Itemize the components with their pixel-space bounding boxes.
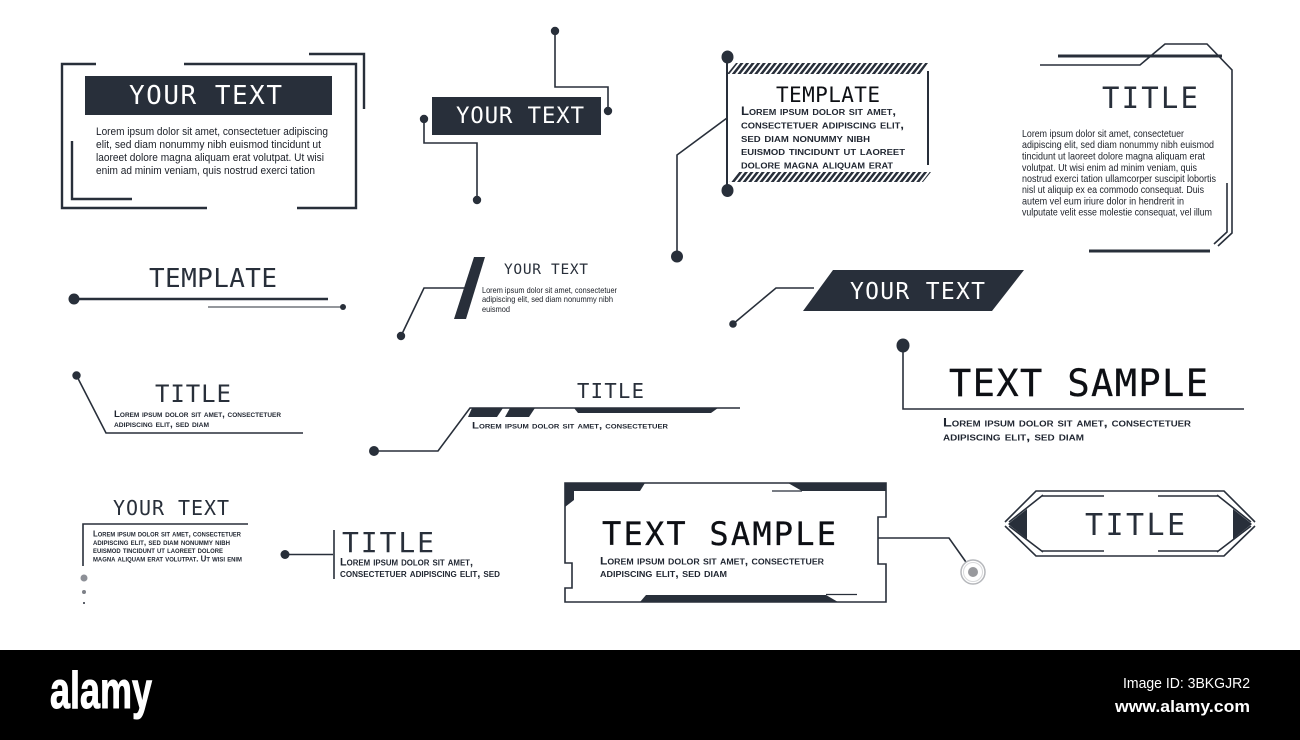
body text [600, 556, 824, 580]
body text: Lorem ipsum dolor sit amet, [340, 556, 473, 568]
slanted bar [454, 257, 485, 319]
connector [285, 530, 334, 579]
image id: Image ID: 3BKGJR2 [1123, 675, 1250, 692]
connector lines [424, 31, 608, 200]
body text: adipiscing elit, sed diam [114, 419, 209, 429]
right arrow [1233, 509, 1252, 539]
body text: volutpat. Ut wisi enim ad minim veniam, quis [1022, 162, 1197, 174]
url: www.alamy.com [1114, 697, 1250, 716]
dot [729, 320, 737, 328]
body text: sed diam nonummy nibh [741, 133, 870, 145]
label text: YOUR TEXT [456, 103, 584, 129]
heading: TITLE [1085, 508, 1185, 543]
panel: title with side connector [280, 526, 500, 580]
body text: Lorem ipsum dolor sit amet, consectetuer [600, 556, 824, 568]
footer bar [0, 650, 1300, 740]
dot [896, 338, 910, 352]
body text: Lorem ipsum dolor sit amet, consectetuer [93, 530, 242, 538]
underline with dots [68, 294, 346, 310]
dots [671, 50, 734, 262]
body text: tincidunt ut laoreet dolore magna aliquam erat [1022, 150, 1205, 162]
parallelogram [803, 270, 1024, 311]
hatched bars [727, 63, 931, 182]
connector [878, 538, 973, 572]
panel: title paragraph with chamfered frame [1022, 44, 1232, 251]
bracket [83, 524, 248, 566]
body text: Lorem ipsum dolor sit amet, consectetuer [943, 416, 1191, 430]
body text: nostrud exerci tation ullamcorper suscipit lobortis [1022, 173, 1216, 185]
heading: TEMPLATE [149, 264, 277, 294]
panel: text sample framed box [565, 483, 985, 602]
logo: alamy [50, 662, 152, 720]
body text: Lorem ipsum dolor sit amet, [741, 106, 896, 118]
frame lines [1040, 44, 1232, 246]
body text: dolore magna aliquam erat [741, 160, 893, 172]
heading: TITLE [155, 380, 231, 408]
heading: YOUR TEXT [129, 81, 282, 111]
spine [727, 57, 928, 190]
heading: TITLE [342, 526, 434, 559]
body text: adipiscing elit, sed diam nonummy nibh [482, 294, 613, 304]
body text: laoreet dolore magna aliquam erat volutpat. Ut wisi [96, 152, 324, 164]
heading: YOUR TEXT [113, 496, 229, 520]
body text: consectetuer adipiscing elit, sed [340, 568, 500, 580]
body text: euismod tincidunt ut laoreet dolore [93, 546, 223, 555]
body text [340, 556, 500, 580]
corner blocks [565, 483, 886, 602]
body text: adipiscing elit, sed diam nonummy nibh euismod [1022, 139, 1214, 151]
label bar [432, 97, 601, 135]
panel: your text with bracket [80, 496, 248, 604]
panel: your text bar with connectors [420, 27, 612, 204]
body text: magna aliquam erat volutpat. Ut wisi enim [93, 554, 242, 564]
panel: text sample with elbow line [896, 338, 1244, 444]
body text: euismod tincidunt ut laoreet [741, 146, 905, 158]
body text: adipiscing elit, sed diam [600, 568, 727, 580]
panel: hexagon title [1005, 491, 1255, 556]
dot [397, 332, 405, 340]
body text: autem vel eum iriure dolor in hendrerit in [1022, 196, 1184, 208]
panel: hatched template box [671, 50, 931, 262]
connector [733, 288, 814, 324]
thin accents [772, 491, 857, 594]
dot [369, 446, 379, 456]
line [374, 408, 740, 451]
panel: title with angled line [72, 371, 303, 433]
connector [677, 118, 727, 256]
panel: title over banded line [369, 379, 740, 456]
panel: template underline [68, 264, 346, 310]
left arrow [1008, 509, 1027, 539]
body text: adipiscing elit, sed diam [943, 430, 1084, 444]
label: YOUR TEXT [850, 279, 985, 305]
heading: TITLE [1102, 81, 1198, 115]
heading: TITLE [577, 379, 644, 403]
heading: TEXT SAMPLE [602, 515, 836, 553]
body text [1022, 128, 1216, 218]
line [903, 345, 1244, 409]
heading: TEMPLATE [776, 83, 880, 107]
body text [741, 106, 905, 172]
body text: Lorem ipsum dolor sit amet, consectetuer [472, 420, 669, 430]
line [76, 376, 303, 433]
heading: YOUR TEXT [504, 262, 588, 278]
body text: euismod [482, 304, 510, 314]
body text: Lorem ipsum dolor sit amet, consectetuer [1022, 128, 1184, 140]
panel: framed your text box [62, 54, 364, 208]
connector [401, 288, 468, 336]
inner lines [1042, 496, 1218, 551]
frame lines [62, 54, 364, 208]
body text: nisl ut aliquip ex ea commodo consequat. Duis [1022, 184, 1204, 196]
body text: Lorem ipsum dolor sit amet, consectetuer adipiscing [96, 126, 328, 138]
body text [93, 530, 242, 564]
dots [80, 574, 88, 604]
heading bar [85, 76, 332, 115]
body text: consectetuer adipiscing elit, [741, 120, 904, 132]
heading: TEXT SAMPLE [949, 362, 1208, 405]
frame [565, 483, 886, 602]
body text [114, 409, 282, 429]
panel: parallelogram your text [729, 270, 1024, 328]
connector dots [420, 27, 612, 204]
body text: adipiscing elit, sed diam nonummy nibh [93, 538, 230, 547]
dot [72, 371, 81, 380]
body text [482, 285, 617, 314]
body text: vulputate velit esse molestie consequat, vel illum [1022, 206, 1212, 218]
body text: Lorem ipsum dolor sit amet, consectetuer [114, 409, 282, 419]
body text: elit, sed diam nonummy nibh euismod tincidunt ut [96, 139, 321, 151]
body text [96, 126, 328, 177]
dot [280, 550, 290, 559]
body text: Lorem ipsum dolor sit amet, consectetuer [482, 285, 617, 295]
bands [468, 408, 718, 417]
body text: enim ad minim veniam, quis nostrud exerci tation [96, 165, 315, 177]
outer frame [1005, 491, 1255, 556]
panel: slanted bar text [397, 257, 617, 340]
body text [943, 416, 1191, 444]
target icon [961, 560, 985, 584]
